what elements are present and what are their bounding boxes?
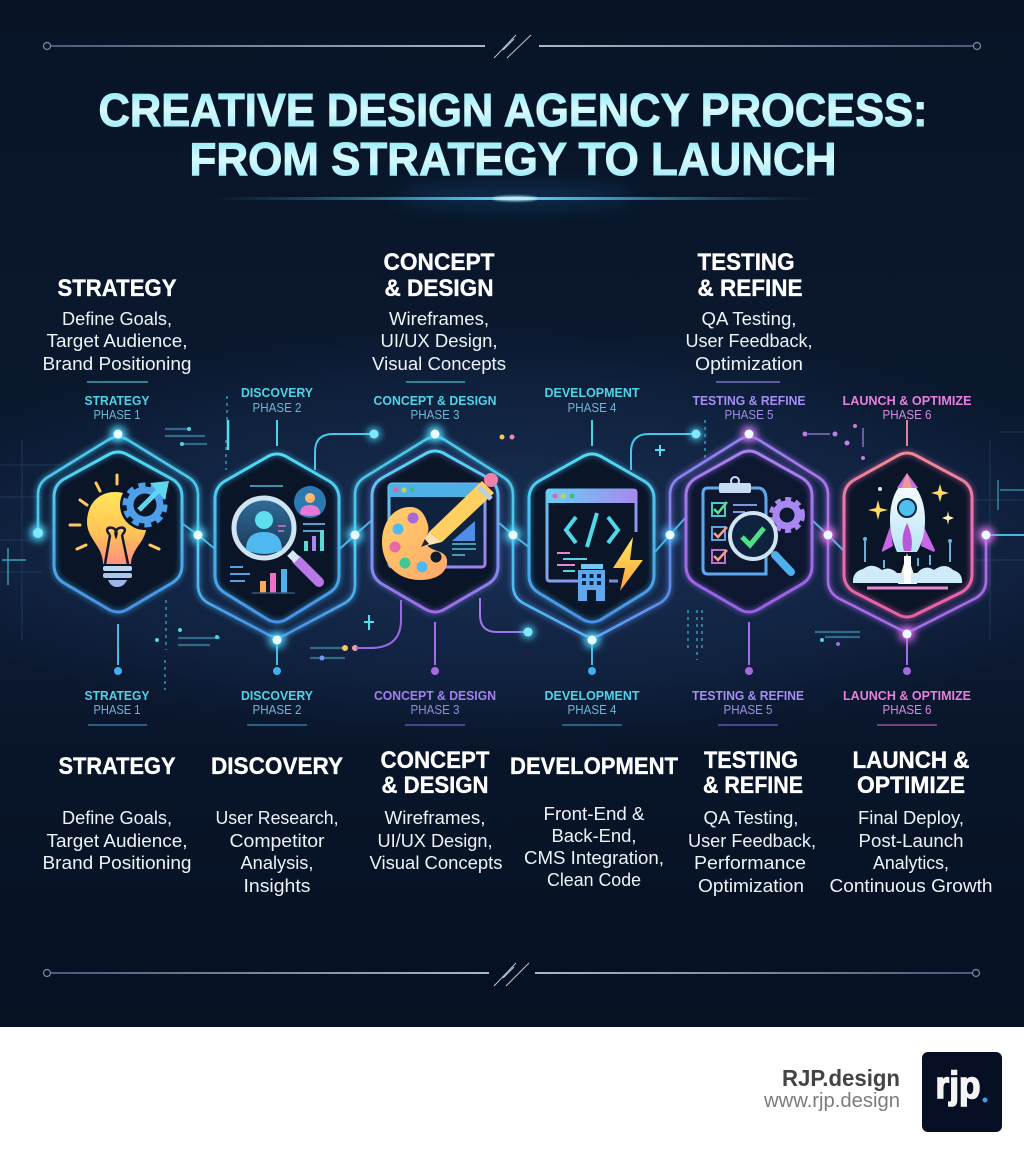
bottom text: testing and refine: TESTING — [704, 747, 798, 774]
bottom text: testing and refine: User Feedback, — [688, 830, 816, 851]
bottom text: launch and optimize: OPTIMIZE — [857, 772, 965, 799]
bottom text: concept and design: Wireframes, — [384, 807, 486, 828]
bottom text: strategy: Target Audience, — [46, 830, 188, 851]
bottom text: discovery: Analysis, — [240, 852, 314, 873]
bottom text: launch and optimize: Post-Launch — [858, 830, 964, 851]
bottom text: launch and optimize: Final Deploy, — [858, 807, 964, 828]
bottom text: discovery: Competitor — [230, 830, 324, 851]
panel: hexagon 5 — [686, 451, 812, 612]
bottom text: discovery: User Research, — [216, 807, 338, 828]
bottom text: discovery — [211, 753, 343, 896]
bottom phase labels: TESTING & REFINE — [692, 688, 804, 703]
top text: concept and design — [372, 249, 506, 383]
bottom phase labels: PHASE 5 — [724, 702, 772, 717]
bottom divider — [44, 963, 980, 986]
bottom phase labels: PHASE 6 — [882, 702, 932, 717]
bottom text: strategy: Brand Positioning — [42, 852, 192, 873]
logo badge — [922, 1052, 1002, 1132]
footer brand text — [763, 1065, 900, 1112]
bottom text: testing and refine: & REFINE — [703, 772, 803, 799]
top phase labels: PHASE 2 — [252, 400, 302, 415]
bottom text: launch and optimize: LAUNCH & — [852, 747, 970, 774]
bottom text: development: Front-End & — [544, 803, 645, 824]
top text: strategy: Target Audience, — [46, 330, 188, 351]
title — [98, 84, 928, 185]
icon: clipboard checklist, gear and magnifier — [703, 477, 803, 574]
top phase labels: STRATEGY — [84, 393, 150, 408]
top divider — [44, 35, 980, 58]
top text: concept and design: & DESIGN — [384, 275, 494, 302]
top text: strategy: STRATEGY — [58, 275, 176, 302]
icon: code window, building and bolt — [547, 489, 643, 601]
top phase labels: CONCEPT & DESIGN — [374, 393, 496, 408]
top text: testing and refine: QA Testing, — [702, 308, 796, 329]
bottom phase labels: PHASE 3 — [410, 702, 460, 717]
footer panel — [0, 1027, 1024, 1154]
bottom text: testing and refine: Optimization — [698, 875, 804, 896]
outer connecting path — [38, 437, 986, 637]
icon: magnifier with user and charts — [230, 486, 326, 593]
bottom text: development: Back-End, — [552, 825, 636, 846]
bottom text: development: DEVELOPMENT — [510, 753, 678, 780]
bottom text: strategy — [42, 753, 192, 873]
panel: hexagon 2 — [215, 454, 339, 622]
top text: strategy: Brand Positioning — [42, 353, 192, 374]
bottom text: development: Clean Code — [547, 869, 641, 890]
top text: concept and design: Visual Concepts — [372, 353, 506, 374]
nodes — [30, 426, 994, 675]
footer brand text: RJP.design — [782, 1065, 900, 1091]
title glow underline — [215, 186, 815, 206]
bottom text: concept and design: CONCEPT — [380, 747, 490, 774]
bottom text: concept and design — [370, 747, 502, 873]
bottom phase labels: DEVELOPMENT — [544, 688, 640, 703]
bottom text: strategy: Define Goals, — [62, 807, 172, 828]
top phase labels: PHASE 3 — [410, 407, 460, 422]
icon: palette and pencil over browser window — [382, 473, 498, 580]
logo badge: rjp — [936, 1065, 980, 1107]
panel: hexagon 1 — [54, 452, 182, 612]
bottom phase labels: LAUNCH & OPTIMIZE — [843, 688, 971, 703]
bottom text: testing and refine — [688, 747, 816, 896]
vertical connectors — [118, 420, 1024, 665]
top text: concept and design: UI/UX Design, — [380, 330, 498, 351]
top text: concept and design: CONCEPT — [384, 249, 495, 276]
icon: light bulb with gear — [70, 475, 170, 587]
title: CREATIVE DESIGN AGENCY PROCESS: — [98, 84, 928, 136]
panel: hexagon 4 — [529, 454, 654, 622]
panel: hexagon 6 — [844, 453, 972, 617]
bottom phase labels: DISCOVERY — [241, 688, 313, 703]
top phase labels: DISCOVERY — [241, 385, 313, 400]
bottom phase labels: CONCEPT & DESIGN — [374, 688, 496, 703]
icon: rocket launch — [853, 473, 962, 588]
top text: concept and design: Wireframes, — [389, 308, 489, 329]
top phase labels: PHASE 1 — [94, 407, 140, 422]
top text: testing and refine — [686, 249, 812, 383]
bottom text: concept and design: & DESIGN — [382, 772, 488, 799]
bottom text: testing and refine: Performance — [694, 852, 806, 873]
bottom text: concept and design: Visual Concepts — [370, 852, 502, 873]
bottom text: launch and optimize: Continuous Growth — [830, 875, 992, 896]
bottom text: discovery: Insights — [244, 875, 310, 896]
bottom text: development — [510, 753, 678, 890]
bottom text: testing and refine: QA Testing, — [704, 807, 798, 828]
bottom phase labels: PHASE 2 — [252, 702, 302, 717]
top text: testing and refine: User Feedback, — [686, 330, 812, 351]
top phase labels — [84, 385, 972, 422]
top phase labels: PHASE 5 — [724, 407, 774, 422]
bottom phase labels: PHASE 4 — [568, 702, 616, 717]
bottom text: strategy: STRATEGY — [58, 753, 176, 780]
title: FROM STRATEGY TO LAUNCH — [190, 133, 836, 185]
panel: hexagon 3 — [372, 451, 498, 612]
bottom text: launch and optimize: Analytics, — [873, 852, 949, 873]
bottom phase labels: PHASE 1 — [94, 702, 140, 717]
bottom phase labels: STRATEGY — [84, 688, 150, 703]
top phase labels: PHASE 4 — [568, 400, 616, 415]
top text: testing and refine: TESTING — [698, 249, 794, 276]
bottom text: development: CMS Integration, — [524, 847, 664, 868]
top text: strategy: Define Goals, — [62, 308, 172, 329]
footer brand text: www.rjp.design — [763, 1090, 900, 1112]
bottom text: concept and design: UI/UX Design, — [378, 830, 492, 851]
top text: testing and refine: & REFINE — [698, 275, 802, 302]
bottom phase labels — [84, 688, 971, 726]
bottom text: discovery: DISCOVERY — [211, 753, 343, 780]
top text: testing and refine: Optimization — [695, 353, 803, 374]
bottom text: launch and optimize — [830, 747, 992, 896]
top text: strategy — [42, 275, 192, 383]
circuit background details — [0, 396, 1024, 690]
top phase labels: LAUNCH & OPTIMIZE — [842, 393, 972, 408]
top phase labels: PHASE 6 — [882, 407, 932, 422]
top phase labels: DEVELOPMENT — [544, 385, 640, 400]
top phase labels: TESTING & REFINE — [692, 393, 806, 408]
